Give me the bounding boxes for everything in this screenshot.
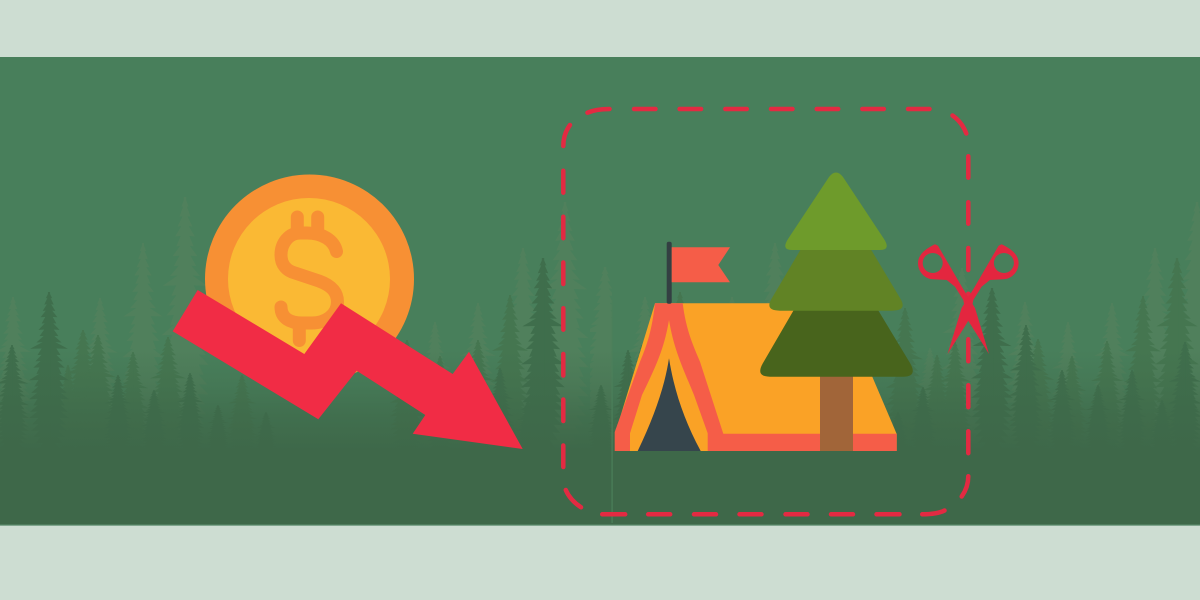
dollar sign [281,217,338,340]
middle tree layer [55,258,1199,458]
icon: pine tree [760,172,913,451]
icon: camping tent [615,242,897,451]
far tree layer [0,197,1200,458]
clipped tree at tile seam [582,267,628,458]
left handle and blade [918,244,989,354]
right handle and blade [948,244,1019,354]
trunk [820,370,853,451]
flag pole [667,242,672,304]
tent opening [638,358,701,451]
green forest band background [0,57,1200,525]
forest floor fade [0,300,1200,526]
flag [672,247,730,282]
tent body [615,303,897,451]
near tree layer [0,258,1200,458]
top foliage [785,172,887,250]
lower foliage [760,305,913,377]
dashed cut line border [563,109,968,514]
infographic canvas [0,57,1200,526]
arrow: falling trend [173,290,523,449]
icon: dollar coin [205,174,414,384]
middle foliage [769,245,903,311]
icon: scissors [918,244,1019,354]
tent frame [615,303,897,451]
